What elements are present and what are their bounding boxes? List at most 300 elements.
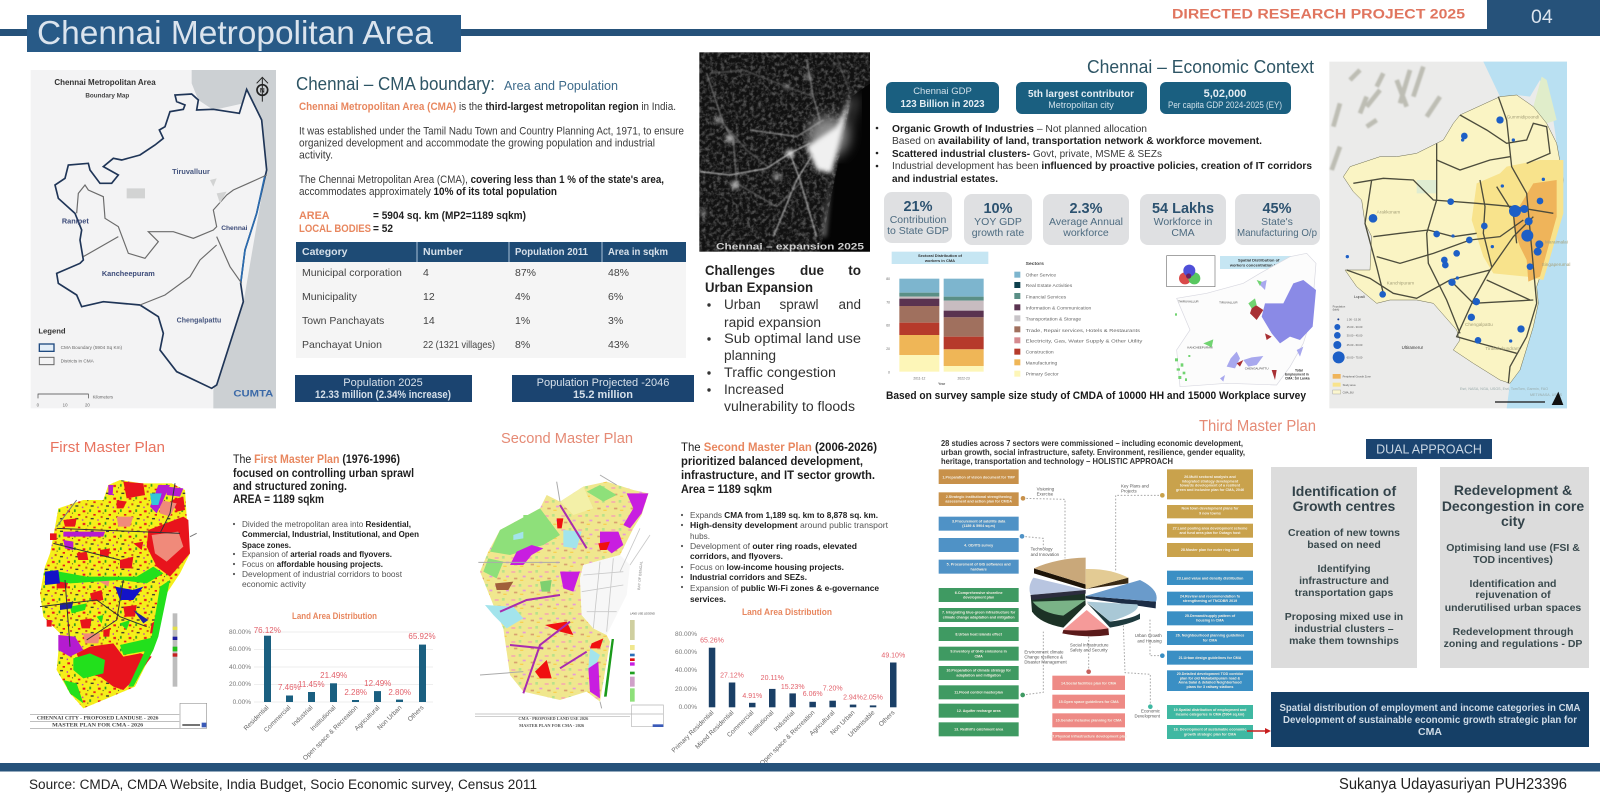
bar chart: second plan land area: 7.20% — [823, 686, 843, 692]
bar chart: first plan land area: 40.00% — [229, 664, 251, 671]
redevelopment card: zoning and regulations - DP — [1444, 638, 1582, 650]
table: 22 (1321 villages) — [423, 339, 495, 351]
bar chart: first plan land area: Non Urban — [376, 704, 404, 732]
challenges list: rapid expansion — [724, 315, 821, 330]
sector stacked bar chart: 20 — [886, 347, 890, 351]
bullets: Focus on affordable housing projects. — [242, 559, 383, 569]
intro text: urban growth, social infrastructure, safety. Environment, resilience, gender equality, — [941, 447, 1245, 457]
place labels: Gummidipoondi — [1507, 114, 1539, 119]
description: Area = 1189 sqkm — [681, 482, 772, 496]
population 2046 box: 15.2 million — [573, 389, 633, 401]
left column boxes: assessment and action plan for CMDA — [945, 500, 1012, 504]
bullets: services. — [690, 594, 726, 604]
economic bullets: and industrial estates. — [892, 174, 998, 185]
bullets: Commercial, Industrial, Institutional, and Open — [242, 529, 419, 539]
right column boxes: New town development plans for — [1181, 507, 1239, 511]
sector stacked bar chart — [886, 252, 988, 386]
map legend: CMA_BU — [1343, 390, 1354, 394]
pie labels: Change resilience & — [1024, 654, 1063, 659]
growth centres card: Growth centres — [1293, 498, 1396, 514]
left column boxes: 11.Flood control masterplan — [954, 691, 1003, 695]
bar chart: first plan land area — [229, 611, 436, 762]
stat: 21% — [884, 192, 952, 243]
right column boxes: green and inclusive plan for CMA, 2046 — [1176, 488, 1244, 492]
panel: economic context — [876, 56, 1320, 402]
bullets — [681, 510, 889, 604]
place labels: Tirukalukundram — [1485, 346, 1520, 351]
challenges list: Traffic congestion — [724, 365, 836, 380]
spatial distribution map: KANCHEEPURAM — [1187, 345, 1213, 349]
redevelopment card: underutilised urban spaces — [1445, 602, 1581, 614]
bar chart: first plan land area: 11.45% — [298, 680, 325, 689]
bar chart: first plan land area: Open space & Recreation — [302, 704, 360, 762]
left column boxes: 10.Preparation of climate strategy for — [946, 669, 1012, 673]
right column boxes: 24.Review and recommendation fo — [1180, 594, 1241, 598]
heading: Chennai – CMA boundary: — [296, 74, 495, 94]
connector dots — [1020, 493, 1165, 709]
right column boxes: for CMA — [1203, 638, 1217, 642]
bullets: corridors, and flyovers. — [690, 551, 783, 561]
dual approach label: DUAL APPROACH — [1376, 442, 1482, 456]
bar chart: second plan land area: Urbanisable — [847, 709, 877, 739]
table: 4 — [423, 267, 429, 279]
challenges heading: to — [848, 263, 861, 278]
redevelopment card: rejuvenation of — [1475, 589, 1551, 601]
bar chart: second plan land area: 20.11% — [761, 675, 784, 682]
left column boxes: 8.Urban heat islands effect — [955, 632, 1003, 636]
intro text: activity. — [299, 150, 333, 162]
place labels: Singaperumal — [1542, 262, 1570, 267]
bullets: hubs. — [690, 531, 710, 541]
bar chart: first plan land area: Land Area Distribution — [292, 611, 377, 621]
pie labels: and Housing — [1137, 638, 1162, 643]
challenges list: Urban — [724, 297, 761, 312]
bullets: Expansion of arterial roads and flyovers. — [242, 549, 392, 559]
bar chart: second plan land area — [671, 607, 905, 767]
growth centres card: Proposing mixed use in — [1285, 611, 1403, 623]
panel: boundary map: Tiruvalluur — [172, 167, 210, 176]
map legend: Population — [1333, 304, 1346, 308]
bar chart: second plan land area: 2.05% — [863, 694, 883, 702]
right column boxes: 21.Urban design guidelines for CMA — [1179, 656, 1242, 660]
sector stacked bar chart: workers in CMA — [924, 258, 955, 263]
pie labels: Environment climate — [1024, 649, 1064, 654]
pie labels: Development — [1134, 713, 1161, 718]
bar chart: second plan land area: 0.00% — [679, 704, 697, 711]
sector legend: Manufacturing — [1026, 360, 1057, 366]
panel: regional map: Ultiramerur — [1402, 345, 1424, 350]
bar chart: second plan land area: 60.00% — [675, 649, 697, 656]
pie labels: Disaster Management — [1024, 659, 1067, 664]
right column boxes: 23.Land value and density distribution — [1177, 576, 1243, 580]
sector legend: Trade, Repair services, Hotels & Restaurants — [1026, 328, 1141, 334]
map title block: CMA - PROPOSED LAND USE 2026 — [518, 716, 589, 721]
right column boxes: and fund area plan for Outagn host — [1180, 531, 1241, 535]
CMA region — [1343, 95, 1563, 383]
right column boxes: Anna Salai & detailed Neighborhood — [1178, 681, 1242, 685]
sector legend: Primary Sector — [1026, 372, 1059, 378]
bar chart: second plan land area: 20.00% — [675, 686, 697, 693]
heading: Chennai – Economic Context — [1087, 56, 1314, 77]
redevelopment card: Redevelopment through — [1453, 626, 1573, 638]
intro text — [941, 438, 1245, 466]
map legend — [173, 613, 177, 687]
economic bullets: Industrial development has been influenced by proactive policies, creation of IT corridors — [892, 161, 1312, 172]
left column boxes: 12. Aquifer recharge area — [957, 709, 1002, 713]
spatial distribution map: Spatial Distribution of — [1238, 257, 1280, 262]
panel: third master plan — [939, 418, 1316, 741]
right column boxes: 20.Detailed development TOD corridor — [1177, 672, 1244, 676]
heading: Second Master Plan — [501, 431, 633, 447]
map legend: 15.00 - 30.00 — [1347, 325, 1363, 329]
stat: 10%: YOY GDP — [974, 216, 1022, 228]
left column boxes: adaptation and mitigation — [956, 673, 1001, 677]
sector stacked bar chart: 80 — [886, 277, 890, 281]
right column boxes: integrated strategy development — [1182, 479, 1239, 483]
right column boxes: strengthening of TNCDBR 2019 — [1183, 599, 1237, 603]
GDP box — [886, 82, 999, 113]
bar chart: second plan land area: Mixed Residential — [694, 709, 736, 751]
bar chart: second plan land area: 40.00% — [675, 667, 697, 674]
sector stacked bar chart: Year — [938, 382, 946, 386]
project label: DIRECTED RESEARCH PROJECT 2025 — [1172, 6, 1466, 22]
contributor box: 5th largest contributor — [1028, 88, 1134, 100]
pie labels: Projects — [1121, 489, 1137, 494]
stat: 2.3%: workforce — [1062, 227, 1109, 239]
bullets: Development of outer ring roads, elevated — [690, 541, 857, 551]
bar chart: second plan land area: 15.23% — [781, 684, 805, 691]
bullets: Expansion of public Wi-Fi zones & e-governance — [690, 583, 879, 593]
pie labels: Visioning — [1037, 486, 1055, 491]
right column boxes: towards development of a resilient — [1180, 484, 1241, 488]
sector legend: Other Service — [1026, 273, 1056, 279]
panel: boundary map: CMA Boundary (5904 Sq Km) — [61, 345, 122, 350]
map legend: (lakh) — [1333, 308, 1339, 312]
pie labels: Exercise — [1037, 492, 1054, 497]
strategic plan callout: CMA — [1418, 726, 1442, 738]
bar chart: second plan land area: Primary Residential — [671, 709, 716, 754]
page number: 04 — [1531, 6, 1553, 28]
place labels: Chengalpattu — [1465, 322, 1493, 327]
sector legend: Real Estate Activities — [1026, 283, 1073, 289]
growth centres card: make them townships — [1289, 635, 1399, 647]
area figures: = 52 — [373, 223, 393, 235]
bar chart: first plan land area: 21.49% — [320, 671, 347, 680]
bar chart: first plan land area: 65.92% — [408, 632, 436, 641]
bar chart: first plan land area: Residential — [243, 704, 271, 732]
area figures: AREA — [299, 210, 330, 222]
map labels: Chennai Metropolitan Area — [54, 78, 156, 87]
redevelopment card: Optimising land use (FSI & — [1446, 542, 1580, 554]
bar chart: second plan land area: Industrial — [773, 709, 797, 733]
stat: 21%: to State GDP — [887, 225, 949, 237]
table: 14 — [423, 315, 435, 327]
place labels: Arakkonam — [1377, 209, 1400, 214]
description: The Second Master Plan (2006-2026) — [681, 440, 877, 454]
challenges list: planning — [724, 348, 776, 363]
GDP box: Chennai GDP — [913, 86, 972, 97]
right column boxes: plan for old Mahabalipuram road & — [1180, 676, 1241, 680]
header bar — [0, 0, 1600, 36]
panel: boundary map: Kancheepuram — [102, 269, 155, 278]
description: AREA = 1189 sqkm — [233, 494, 324, 506]
panel: regional map: METI/NASA, USGS — [1530, 393, 1563, 397]
bar chart: first plan land area: Institutional — [309, 704, 338, 733]
intro text: The Chennai Metropolitan Area (CMA), covering less than 1 % of the state's area, — [299, 174, 664, 186]
panel: second master plan — [475, 431, 905, 767]
table: 3% — [608, 315, 623, 327]
table: 6% — [608, 291, 623, 303]
land use map — [475, 475, 663, 728]
sea — [192, 70, 276, 408]
sector legend: Transportation & Storage — [1026, 316, 1081, 322]
contributor box — [1016, 82, 1147, 114]
population 2025 box: 12.33 million (2.34% increase) — [315, 389, 451, 401]
bar chart: first plan land area: 60.00% — [229, 646, 251, 653]
area figures: = 5904 sq. km (MP2=1189 sqkm) — [373, 210, 526, 222]
intro text: organized development and accommodate the growing population and industrial — [299, 138, 655, 150]
spatial distribution map: TIRUVALLUR — [1219, 300, 1238, 304]
redevelopment card: Decongestion in core — [1442, 498, 1584, 514]
place labels — [1377, 114, 1570, 351]
strategic plan callout: Spatial distribution of employment and income categories in CMA — [1280, 702, 1581, 714]
bar chart: first plan land area: 7.46% — [278, 683, 301, 692]
terrain — [1332, 67, 1440, 170]
stat: 45%: 45% — [1262, 201, 1292, 217]
bullets: High-density development around public transport — [690, 520, 889, 530]
bullets: Development of industrial corridors to boost — [242, 569, 403, 579]
population circles — [1346, 116, 1545, 344]
growth centres card: industrial clusters – — [1294, 623, 1394, 635]
population 2025 box — [295, 375, 472, 402]
bar chart: first plan land area: Commercial — [263, 704, 293, 734]
map legend — [630, 611, 655, 702]
spatial distribution map: CHENGALPATTU — [1245, 366, 1269, 370]
left column boxes: 4. OD/ITS survey — [964, 543, 994, 547]
population 2025 box: Population 2025 — [343, 377, 423, 389]
left column boxes: 6.Comprehensive shoreline — [955, 591, 1003, 595]
pie labels: Urban Growth — [1135, 633, 1162, 638]
table: 43% — [608, 339, 629, 351]
challenges list — [707, 297, 861, 414]
centre boxes — [1050, 676, 1127, 741]
pie labels: Economic — [1141, 708, 1161, 713]
map title block — [475, 705, 663, 728]
right column boxes: 25.Demand/supply pattern of — [1185, 614, 1236, 618]
footer bar — [0, 763, 1600, 772]
bullets: Divided the metropolitan area into Residential, — [242, 519, 411, 529]
sector legend: Financial Services — [1026, 295, 1067, 301]
left column boxes: 7. Integrating blue-green infrastructure for — [942, 611, 1016, 615]
right column boxes: 26.Multi sectoral analysis and — [1184, 475, 1236, 479]
intro text: accommodates approximately 10% of its total population — [299, 186, 557, 198]
bullets: Expands CMA from 1,189 sq. km to 8,878 sq. km. — [690, 510, 878, 520]
stat: 2.3% — [1043, 194, 1129, 245]
map title block: CHENNAI CITY - PROPOSED LANDUSE - 2026 — [37, 717, 159, 722]
pie labels — [1024, 484, 1162, 718]
economic bullets: Scattered industrial clusters- Govt, private, MSME & SEZs — [892, 149, 1162, 160]
right column boxes: plans for 3 railway stations — [1187, 685, 1233, 689]
table: 8% — [515, 339, 530, 351]
sector stacked bar chart: 2022-23 — [958, 376, 970, 380]
bar chart: first plan land area: Others — [407, 704, 426, 723]
sub heading: Area and Population — [504, 79, 618, 93]
growth centres card: Identifying — [1317, 563, 1371, 575]
intro text: It was established under the Tamil Nadu Town and Country Planning Act, 1971, to ensure — [299, 126, 684, 138]
panel: regional map — [1329, 62, 1570, 408]
bar chart: first plan land area: 12.49% — [364, 679, 391, 688]
survey note: Based on survey sample size study of CMDA of 10000 HH and 15000 Workplace survey — [886, 390, 1306, 402]
growth centres card — [1271, 467, 1417, 668]
right column boxes — [1167, 469, 1253, 739]
spatial distribution map: workers concentration in CMA — [1229, 263, 1288, 268]
map legend: LAND USE LEGEND — [630, 611, 655, 615]
bar chart: first plan land area: 0.00% — [233, 699, 251, 706]
bullets — [233, 519, 419, 589]
right column boxes: growth strategic plan for CMA — [1184, 732, 1236, 736]
sea — [1483, 62, 1567, 408]
bar chart: first plan land area: 80.00% — [229, 629, 251, 636]
bar chart: second plan land area: Others — [878, 709, 897, 728]
spatial distribution map: Employment in — [1285, 373, 1309, 377]
challenges heading: Challenges — [705, 263, 775, 278]
growth centres card: transportation gaps — [1295, 587, 1393, 599]
stat: 45%: Manufacturing O/p — [1237, 227, 1317, 239]
bar chart: second plan land area: 6.06% — [803, 691, 823, 698]
district lines — [77, 175, 267, 305]
legend: Legend — [38, 326, 66, 335]
stat: 54 Lakhs: CMA — [1171, 227, 1195, 239]
map boundary — [55, 89, 267, 388]
stat: 2.3%: 2.3% — [1069, 201, 1103, 217]
strategic plan callout — [1271, 692, 1589, 747]
left column boxes: hardware — [971, 567, 987, 571]
bar chart: second plan land area: 65.26% — [700, 638, 724, 644]
panel: boundary map: Kilometers — [93, 394, 113, 399]
table: Panchayat Union — [302, 339, 382, 351]
spatial distribution map: THIRUVALLUR — [1178, 299, 1199, 303]
map title block: MASTER PLAN FOR CMA - 2026 — [519, 723, 585, 728]
bar chart: first plan land area: 76.12% — [254, 626, 281, 635]
sector legend — [1014, 261, 1143, 378]
left column boxes: 9.Inventory of GHG emissions in — [950, 650, 1007, 654]
centre boxes: 16.Gender inclusive planning for CMA — [1056, 719, 1122, 723]
bar chart: second plan land area: 49.10% — [881, 652, 905, 660]
table — [296, 242, 686, 358]
table: 87% — [515, 267, 536, 279]
growth centres card: infrastructure and — [1299, 575, 1389, 587]
pie labels: and Innovation — [1031, 552, 1060, 557]
table: Municipality — [302, 291, 358, 303]
stat: 21%: 21% — [903, 199, 933, 215]
connector lines — [1022, 495, 1162, 707]
panel: regional map: Lupali — [1354, 294, 1365, 299]
challenges list: sprawl — [779, 297, 819, 312]
pie labels: Safety and Security — [1070, 647, 1108, 652]
growth centres card: based on need — [1307, 539, 1381, 551]
map legend: 1.00 - 15.00 — [1347, 317, 1361, 321]
left column boxes: 13. Redhill's catchment area — [954, 728, 1004, 732]
challenges heading — [705, 263, 861, 295]
centre boxes: 15.Open space guidelines for CMA — [1059, 700, 1119, 704]
table: 4% — [515, 291, 530, 303]
map title block: MASTER PLAN FOR CMA - 2026 — [52, 724, 144, 729]
contributor box: Metropolitan city — [1048, 100, 1114, 110]
per capita box — [1160, 82, 1291, 114]
bar chart: second plan land area: 4.91% — [742, 693, 762, 700]
north arrow — [257, 85, 268, 95]
table: 48% — [608, 267, 629, 279]
bar chart: second plan land area: Open space & Recreation — [759, 709, 817, 767]
stat: 10%: growth rate — [972, 227, 1024, 239]
map legend: Study area — [1343, 383, 1356, 387]
dual approach label — [1366, 439, 1492, 459]
panel: boundary map: Districts in CMA — [61, 358, 95, 363]
table: Area in sqkm — [608, 246, 668, 258]
per capita box: Per capita GDP 2024-2025 (EY) — [1168, 100, 1282, 110]
left column boxes: (1189 & 5904 sq.m) — [962, 524, 996, 528]
growth centres card: Identification of — [1292, 483, 1396, 499]
description: and structured zoning. — [233, 481, 347, 493]
panel: challenges — [705, 263, 861, 414]
population 2046 box — [512, 375, 694, 402]
description: focused on controlling urban sprawl — [233, 468, 414, 480]
place labels: Kanchipuram — [1387, 280, 1414, 285]
redevelopment card: Redevelopment & — [1454, 482, 1572, 498]
table: 12 — [423, 291, 435, 303]
right column boxes: 26. Neighbourhood planning guidelines — [1176, 634, 1244, 638]
panel: boundary map — [31, 70, 276, 408]
image caption: Chennai – expansion 2025 — [716, 241, 864, 251]
intro text: 28 studies across 7 sectors were commissioned – including economic development, — [941, 438, 1243, 448]
panel: boundary map: Ranipet — [62, 216, 89, 225]
source note: Source: CMDA, CMDA Website, India Budget, Socio Economic survey, Census 2011 — [29, 777, 537, 792]
panel: area and population text — [295, 74, 694, 402]
bar chart: second plan land area: Commercial — [726, 709, 756, 739]
table: Population 2011 — [515, 246, 588, 258]
redevelopment card: city — [1501, 513, 1525, 529]
economic bullets — [876, 124, 1312, 185]
right column boxes: 19.Spatial distribution of employment and — [1174, 708, 1246, 712]
stat: 2.3%: Average Annual — [1049, 216, 1123, 228]
scale bar and attribution: Esri, NASA, NGA, USGS, Esri, TomTom, Garmin, FAO — [1460, 387, 1548, 391]
sector stacked bar chart: 70 — [886, 300, 890, 304]
land use map: BAY OF BENGAL — [637, 561, 644, 590]
stat: 45% — [1235, 194, 1320, 245]
land use map — [30, 480, 207, 729]
bar chart: first plan land area: Agricultural — [353, 704, 382, 732]
economic bullets: Organic Growth of Industries – Not planned allocation — [892, 124, 1147, 135]
challenges list: vulnerability to floods — [724, 399, 855, 414]
map legend: 45.00 - 60.00 — [1347, 343, 1363, 347]
intro text — [299, 101, 684, 198]
right column boxes: income categories in CMA (5904 sq.km) — [1176, 713, 1245, 717]
stat: 54 Lakhs — [1140, 194, 1226, 245]
description: infrastructure, and IT sector growth. — [681, 468, 875, 482]
sector stacked bar chart: 60 — [886, 324, 890, 328]
table: Category — [302, 246, 348, 258]
studies diagram — [939, 469, 1253, 741]
panel: boundary map: N — [260, 88, 265, 95]
left column boxes: 2.Strategic institutional strengthening — [946, 495, 1012, 499]
bullets: economic activity — [242, 579, 307, 589]
bar chart: second plan land area: Institutional — [747, 709, 776, 738]
bar chart: second plan land area: Land Area Distribution — [742, 607, 832, 617]
title: Chennai Metropolitan Area — [37, 14, 434, 51]
left column boxes — [939, 469, 1019, 736]
roads — [1347, 97, 1553, 383]
pie labels: Social Infrastructure — [1070, 642, 1109, 647]
